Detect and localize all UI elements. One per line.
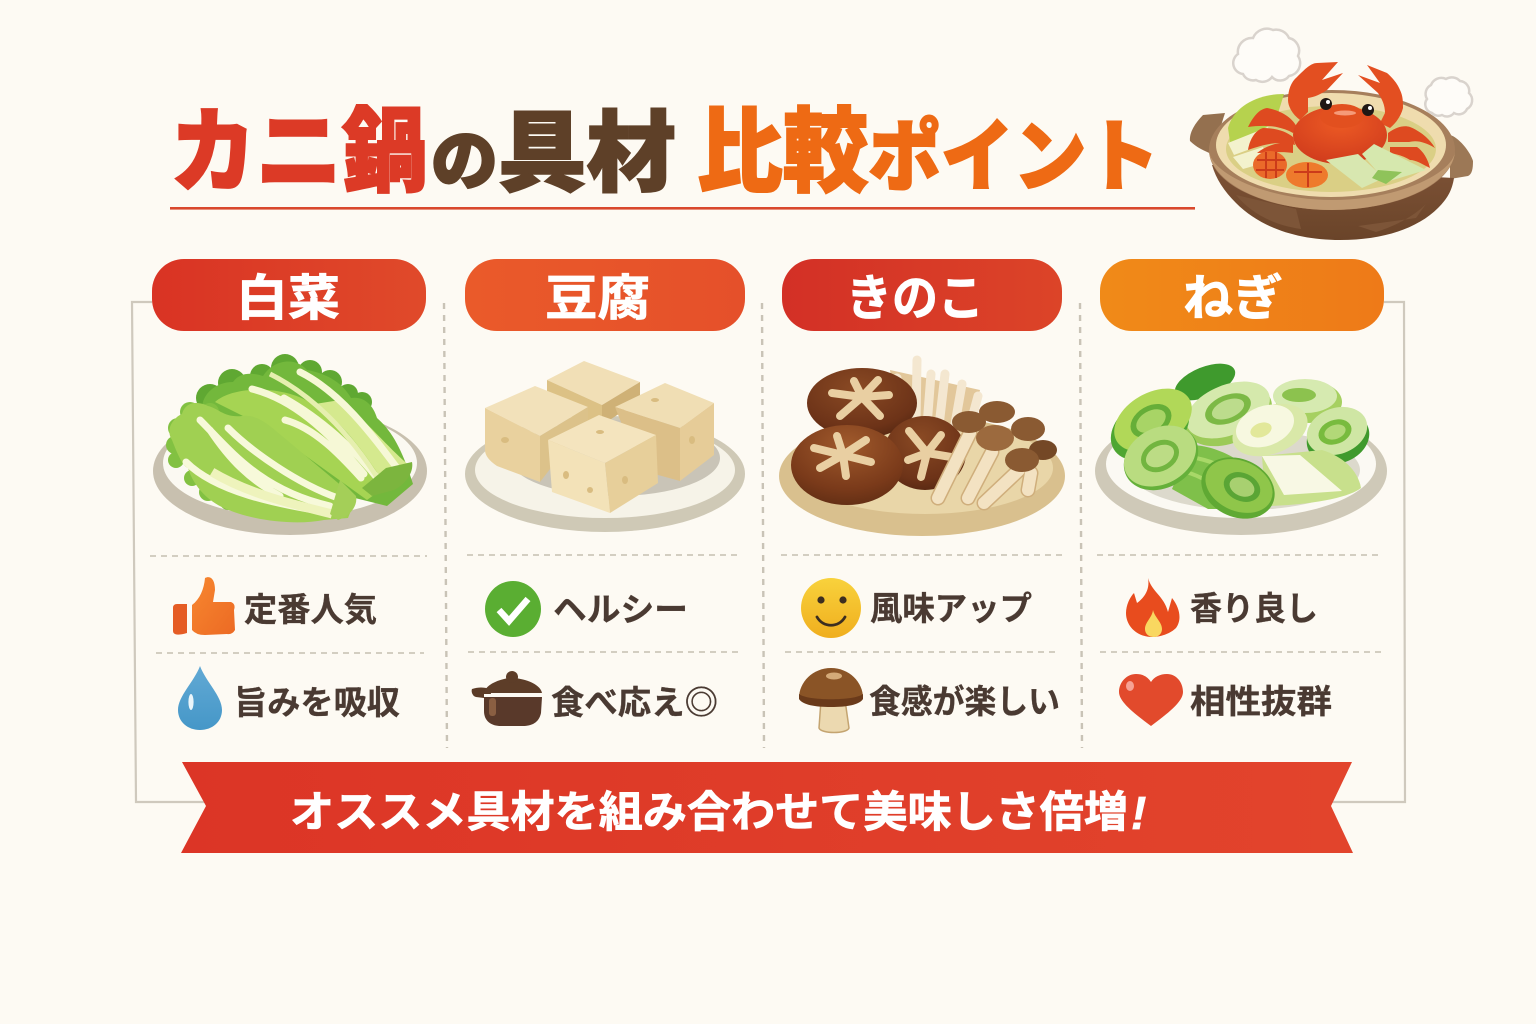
column: 白菜	[152, 259, 427, 730]
header: ねぎ	[1100, 259, 1384, 331]
row: pot: 食べ応え◎	[551, 684, 718, 721]
illustration: leeks	[1095, 356, 1387, 535]
header: 豆腐	[465, 259, 745, 331]
title underline	[170, 207, 1195, 210]
header: きのこ	[782, 259, 1062, 331]
crab claws	[1288, 62, 1403, 128]
pot rim	[1209, 90, 1455, 210]
row: water drop: 旨みを吸収	[234, 684, 400, 721]
header: ねぎ: ねぎ	[1183, 272, 1283, 326]
banner	[181, 762, 1353, 853]
title: crab hotpot: カニ鍋	[170, 102, 428, 204]
broth	[1216, 93, 1446, 197]
banner text: !	[1131, 787, 1146, 839]
crab legs	[1248, 108, 1435, 168]
icon: mushroom	[799, 668, 863, 732]
row: pot	[472, 671, 718, 726]
row: mushroom: 食感が楽しい	[869, 683, 1060, 720]
crab body	[1293, 106, 1387, 164]
banner text: オススメ具材を組み合わせて美味しさ倍増	[290, 789, 1128, 837]
header: 白菜: 白菜	[236, 272, 340, 326]
row: smile	[801, 578, 1032, 638]
row: flame: 香り良し	[1190, 590, 1318, 627]
icon: water drop	[178, 666, 222, 730]
icon: flame	[1126, 578, 1179, 637]
icon: thumbs up	[173, 577, 235, 635]
row: mushroom	[799, 668, 1060, 732]
header: 白菜	[152, 259, 426, 331]
row dividers	[150, 555, 1384, 653]
icon: check mark	[485, 581, 541, 637]
column: ねぎ	[1095, 259, 1387, 726]
cabbage in pot	[1228, 94, 1284, 146]
row: thumbs up: 定番人気	[244, 591, 377, 628]
row: check	[485, 581, 688, 637]
steam clouds	[1233, 29, 1472, 116]
banner ribbon	[181, 762, 1353, 853]
crab eyes	[1320, 98, 1332, 110]
icon: smiley	[801, 578, 861, 638]
title: comparison points: 比較ポイント	[697, 102, 1159, 204]
illustration: mushrooms	[779, 360, 1065, 536]
row: thumbs up	[173, 577, 377, 635]
illustration: tofu	[465, 361, 745, 532]
title: particle and ingredients: の具材	[431, 104, 676, 203]
row: heart	[1119, 674, 1332, 726]
illustration: napa cabbage	[153, 354, 427, 535]
row: check: ヘルシー	[553, 591, 688, 628]
row: smile: 風味アップ	[870, 590, 1032, 627]
row: water drop	[178, 666, 400, 730]
row: heart: 相性抜群	[1190, 683, 1332, 720]
icon: pot	[472, 671, 542, 726]
vegetables in pot	[1253, 151, 1287, 179]
column dividers	[444, 303, 1082, 748]
header: 豆腐: 豆腐	[545, 272, 650, 326]
header: きのこ: きのこ	[846, 272, 984, 326]
illustration: crab hotpot	[1190, 29, 1473, 240]
row: flame	[1126, 578, 1318, 637]
table frame	[132, 302, 1405, 802]
pot handles	[1190, 113, 1225, 154]
title	[170, 102, 1159, 204]
column: 豆腐	[465, 259, 745, 726]
icon: heart	[1119, 674, 1183, 726]
pot body	[1212, 165, 1454, 240]
column: きのこ	[779, 259, 1065, 732]
